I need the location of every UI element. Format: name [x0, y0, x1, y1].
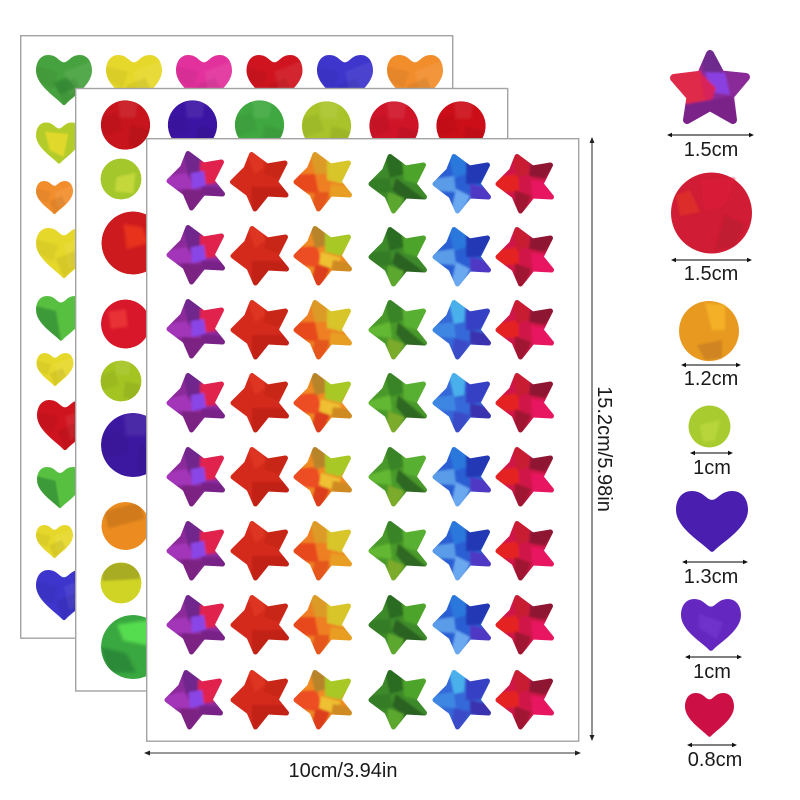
star row 2: [160, 219, 561, 293]
panel: back sheet of heart stickers: [21, 36, 453, 638]
arrow: sheet height: [590, 137, 594, 741]
star row 8: [158, 664, 561, 736]
star row 5: [160, 441, 561, 513]
star row 3: [160, 293, 561, 366]
label: 1.3cm: [684, 566, 738, 588]
arrow: sheet width: [144, 750, 581, 756]
label: 1.2cm: [684, 368, 738, 390]
sample: 1.5cm circle: [671, 172, 752, 285]
circles top row: [101, 100, 486, 151]
arrow: [685, 655, 742, 659]
panel: front sheet of star stickers: [147, 139, 579, 741]
hearts top row: [36, 55, 443, 105]
sample: 1cm circle: [688, 406, 733, 479]
arrow: [687, 743, 737, 747]
icon: circle sticker: [671, 172, 752, 254]
sample: 1.5cm star: [667, 50, 754, 156]
star row 4: [160, 367, 561, 439]
text: width dimension: 10cm/3.94in: [289, 760, 397, 782]
icon: heart sticker: [681, 599, 741, 651]
circles left column: [100, 158, 146, 679]
icon: heart sticker: [676, 491, 748, 552]
label: 1.5cm: [684, 263, 738, 285]
label: 0.8cm: [688, 749, 742, 771]
label: 1cm: [693, 457, 731, 479]
arrow: [690, 451, 733, 455]
hearts left column: [36, 122, 93, 620]
arrow: [671, 258, 752, 262]
sample: 1cm heart: [681, 599, 742, 683]
arrow: [681, 363, 741, 367]
sample: 1.2cm circle: [679, 301, 741, 390]
label: 1cm: [693, 661, 731, 683]
text: height dimension: 15.2cm/5.98in: [593, 386, 615, 512]
star row 6: [160, 515, 561, 587]
icon: circle sticker: [679, 301, 739, 361]
star row 7: [160, 589, 561, 661]
label: 1.5cm: [684, 139, 738, 161]
icon: heart sticker: [685, 693, 734, 737]
icon: star sticker: [670, 50, 750, 124]
panel: middle sheet of circle stickers: [76, 88, 508, 691]
sample: 0.8cm heart: [685, 693, 742, 771]
arrow: [667, 133, 754, 137]
icon: circle sticker: [688, 406, 730, 448]
star row 1: [160, 145, 561, 220]
arrow: [682, 560, 748, 564]
sample: 1.3cm heart: [676, 491, 748, 588]
